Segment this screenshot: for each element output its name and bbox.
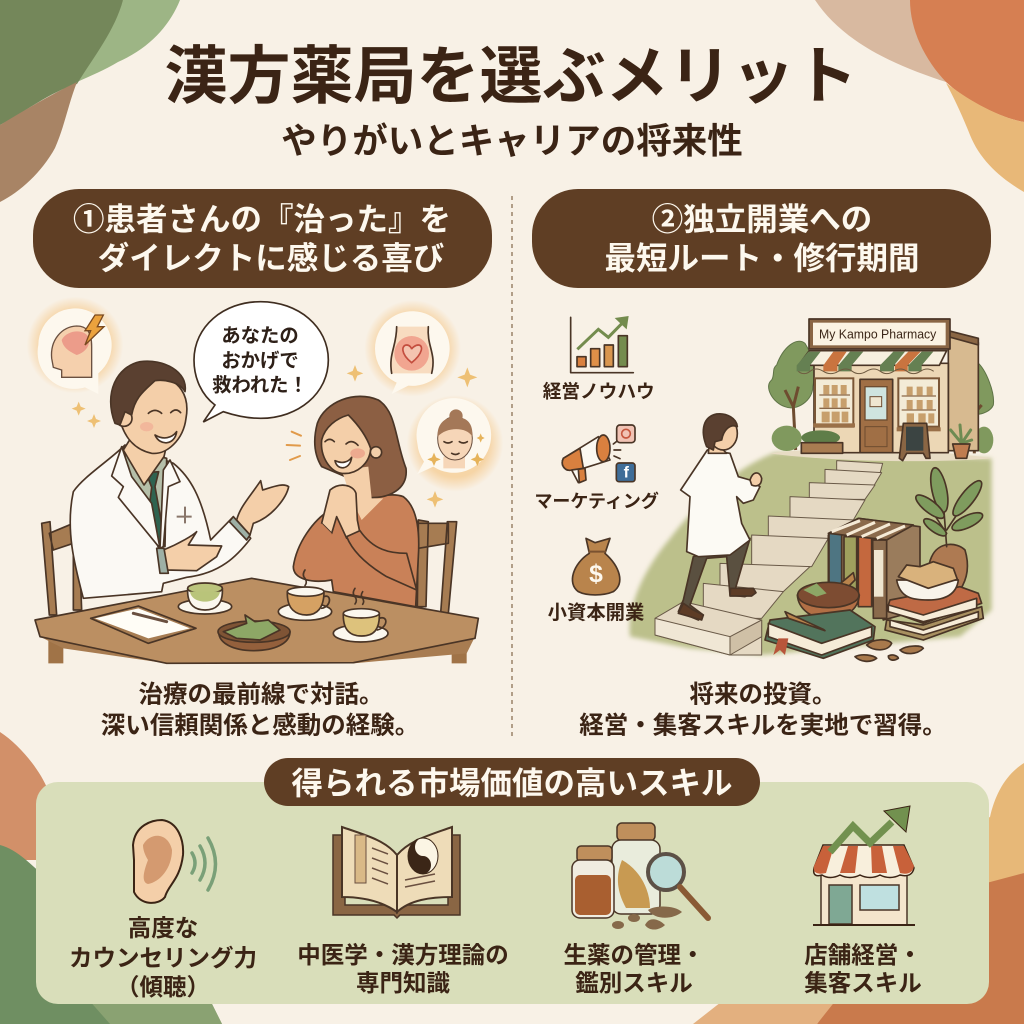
illustration: consultation scene <box>27 297 503 663</box>
stack of herb books and plant <box>765 466 986 661</box>
shop sign <box>809 319 950 349</box>
caption: left panel: 治療の最前線で対話。 <box>138 680 384 708</box>
skills heading <box>264 758 760 806</box>
caption: right panel: 将来の投資。 <box>690 680 836 708</box>
icon: megaphone with social media <box>562 425 635 483</box>
skill label: counseling: （傾聴） <box>116 974 210 1000</box>
icon: money bag <box>572 538 620 595</box>
skill label: counseling: カウンセリング力 <box>69 944 257 971</box>
speech bubble: おかげで <box>221 350 299 372</box>
skill label: TCM theory: 専門知識 <box>356 970 450 996</box>
icon: clear skin face bubble <box>407 395 503 492</box>
title: 漢方薬局を選ぶメリット <box>164 42 858 112</box>
pharmacy building <box>797 319 978 461</box>
caption: right panel <box>579 680 947 740</box>
panel heading: joy of patients' recovery <box>33 189 492 288</box>
caption: left panel <box>101 680 419 740</box>
skill label: crude drug management: 生薬の管理・ <box>564 942 704 968</box>
icon: shop with rising arrow <box>813 806 915 925</box>
shop windows <box>813 378 941 431</box>
panel heading: shortest route to independence: ②独立開業への <box>652 201 872 237</box>
herb bowl <box>218 615 290 651</box>
cups of tea <box>178 570 388 642</box>
trees and shrubs <box>769 341 994 453</box>
icon: ear with sound waves <box>133 820 216 903</box>
caption: left panel: 深い信頼関係と感動の経験。 <box>101 712 419 740</box>
mortar with herbs <box>797 573 859 619</box>
icon: sparkles <box>72 365 477 508</box>
icon: megaphone with social media: f <box>624 464 630 481</box>
chairs <box>42 520 457 615</box>
icon: headache bubble <box>27 297 123 394</box>
scattered herbs <box>855 640 923 661</box>
table <box>35 578 478 663</box>
blackboard sign <box>899 423 930 461</box>
panel heading: shortest route to independence: 最短ルート・修行期間 <box>604 240 920 276</box>
speech bubble <box>194 302 328 422</box>
panel heading: joy of patients' recovery: ダイレクトに感じる喜び <box>98 240 444 276</box>
doctor <box>70 361 289 598</box>
subtitle: やりがいとキャリアの将来性 <box>281 121 743 161</box>
panel: marketable skills <box>36 758 989 1004</box>
skill label: TCM theory <box>297 942 509 996</box>
skill label: store management <box>804 942 922 996</box>
door <box>860 379 893 453</box>
speech bubble: 救われた！ <box>212 374 308 396</box>
skill label: TCM theory: 中医学・漢方理論の <box>297 942 509 968</box>
icon: healthy abdomen bubble <box>364 300 461 397</box>
skill label: store management: 店舗経営・ <box>804 942 922 968</box>
skill label: counseling: 高度な <box>128 915 198 941</box>
illustration: route to own pharmacy <box>534 316 994 661</box>
awning <box>797 351 947 374</box>
hillside <box>630 449 992 655</box>
shop sign: My Kampo Pharmacy <box>819 326 937 341</box>
planter <box>801 430 843 453</box>
icon: growth chart <box>571 316 633 373</box>
label: marketing: マーケティング <box>534 490 659 511</box>
skill label: store management: 集客スキル <box>804 970 922 996</box>
panel heading: shortest route to independence <box>532 189 991 288</box>
panel heading: joy of patients' recovery: ①患者さんの『治った』を <box>73 201 451 237</box>
caption: right panel: 経営・集客スキルを実地で習得。 <box>579 712 947 740</box>
book stack lower left <box>765 610 875 658</box>
potted leafy plant <box>913 466 986 590</box>
skill label: crude drug management: 鑑別スキル <box>575 970 693 996</box>
speech bubble: あなたの <box>221 325 299 347</box>
patient <box>287 396 419 607</box>
potted plant <box>951 425 972 458</box>
icon: herb jars and magnifier <box>572 823 708 930</box>
standing books <box>828 518 920 620</box>
skill label: crude drug management <box>564 942 704 996</box>
icon: open book with yin-yang <box>333 827 460 918</box>
clipboard <box>91 606 196 643</box>
label: management know-how: 経営ノウハウ <box>543 381 655 402</box>
pharmacist climbing stairs <box>678 414 762 620</box>
skills heading: 得られる市場価値の高いスキル <box>291 765 733 801</box>
label: low-capital start-up: 小資本開業 <box>548 602 644 624</box>
skill label: counseling <box>69 915 257 1000</box>
book stack lower right with bowl <box>885 562 983 640</box>
divider line <box>511 196 513 738</box>
icon: money bag: $ <box>589 561 603 588</box>
stone stairs <box>655 461 883 655</box>
